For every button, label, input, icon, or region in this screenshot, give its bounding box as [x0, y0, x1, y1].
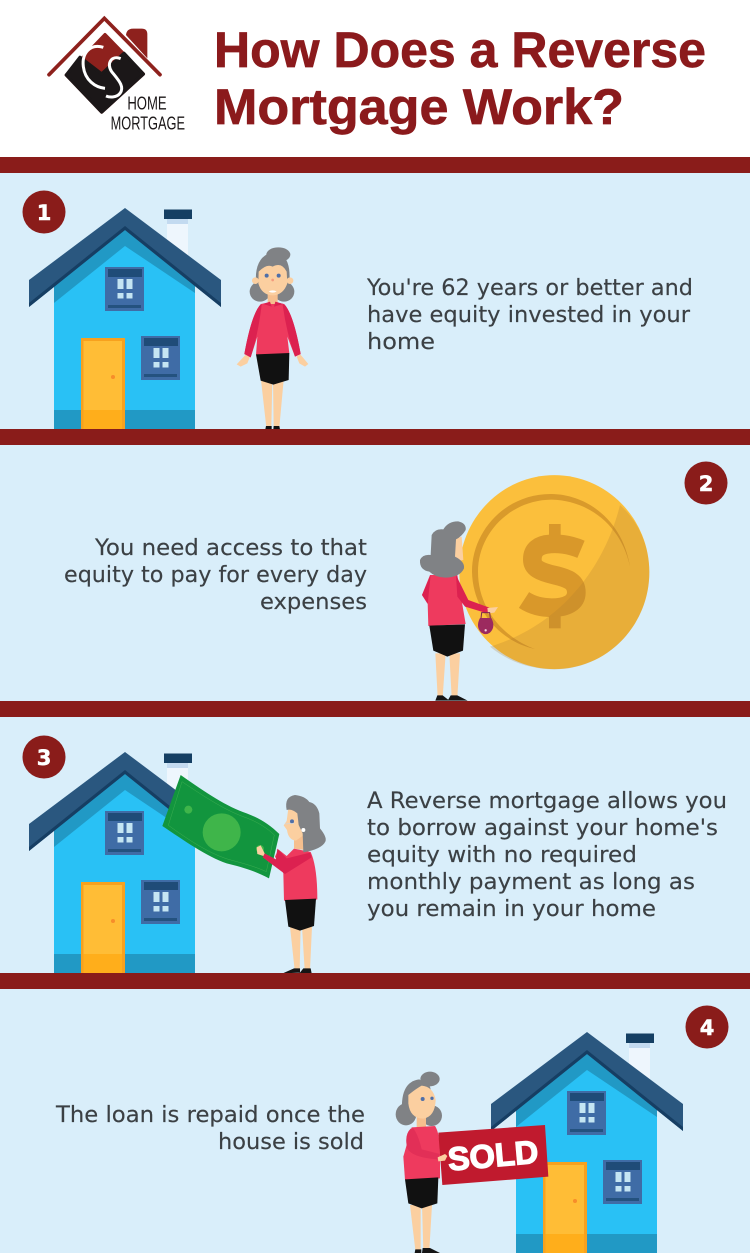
panel: step 1	[22, 190, 693, 430]
text: step 1: have equity invested in your	[367, 302, 691, 328]
step number 2: 2	[699, 472, 713, 496]
panel: step 3	[22, 736, 727, 974]
woman's hair	[286, 795, 326, 852]
text: step 2: expenses	[260, 589, 367, 615]
icon: house	[29, 752, 221, 974]
text: step 4: house is sold	[218, 1129, 364, 1155]
divider band 2	[0, 701, 750, 717]
divider band 3	[0, 973, 750, 989]
woman's hair	[420, 521, 466, 578]
text: step 3: you remain in your home	[367, 896, 656, 922]
icon: dollar sign	[524, 524, 581, 628]
figure: woman handing cash	[162, 775, 326, 973]
text: step 4	[55, 1102, 365, 1155]
text: step 2: You need access to that	[94, 535, 367, 561]
panel: step 2	[64, 462, 728, 701]
logo: CS Home Mortgage: MORTGAGE	[111, 113, 185, 134]
icon: banknote	[162, 775, 279, 878]
icon: house	[491, 1032, 683, 1253]
step number 3	[22, 736, 66, 778]
text: step 1: home	[367, 329, 435, 355]
title	[214, 22, 706, 135]
figure: older woman standing	[237, 247, 308, 429]
icon: house	[29, 208, 221, 430]
step number 1: 1	[37, 201, 51, 225]
figure: woman holding sold sign	[396, 1072, 548, 1253]
logo: CS Home Mortgage: HOME	[127, 93, 167, 114]
logo: CS Home Mortgage	[49, 18, 185, 134]
step number 2	[684, 462, 728, 504]
text: step 3: monthly payment as long as	[367, 869, 695, 895]
text: step 1: You're 62 years or better and	[366, 275, 693, 301]
title: How Does a Reverse	[214, 22, 706, 78]
sold sign: SOLD	[446, 1133, 540, 1178]
step number 4	[686, 1006, 728, 1048]
text: step 3: to borrow against your home's	[367, 815, 718, 841]
text: step 3: equity with no required	[367, 842, 637, 868]
step number 4: 4	[700, 1016, 714, 1040]
text: step 2	[64, 535, 367, 615]
text: step 4: The loan is repaid once the	[55, 1102, 365, 1128]
step number 1	[22, 190, 66, 234]
text: step 3: A Reverse mortgage allows you	[367, 788, 727, 814]
panel: step 4	[55, 1006, 729, 1253]
step number 3: 3	[37, 746, 51, 770]
text: step 2: equity to pay for every day	[64, 562, 367, 588]
text: step 1	[366, 275, 693, 355]
divider band 1	[0, 429, 750, 445]
title: Mortgage Work?	[214, 79, 624, 135]
divider band top	[0, 157, 750, 173]
illustration: giant coin with woman	[420, 475, 649, 701]
sold sign	[438, 1125, 548, 1185]
text: step 3	[367, 788, 727, 922]
